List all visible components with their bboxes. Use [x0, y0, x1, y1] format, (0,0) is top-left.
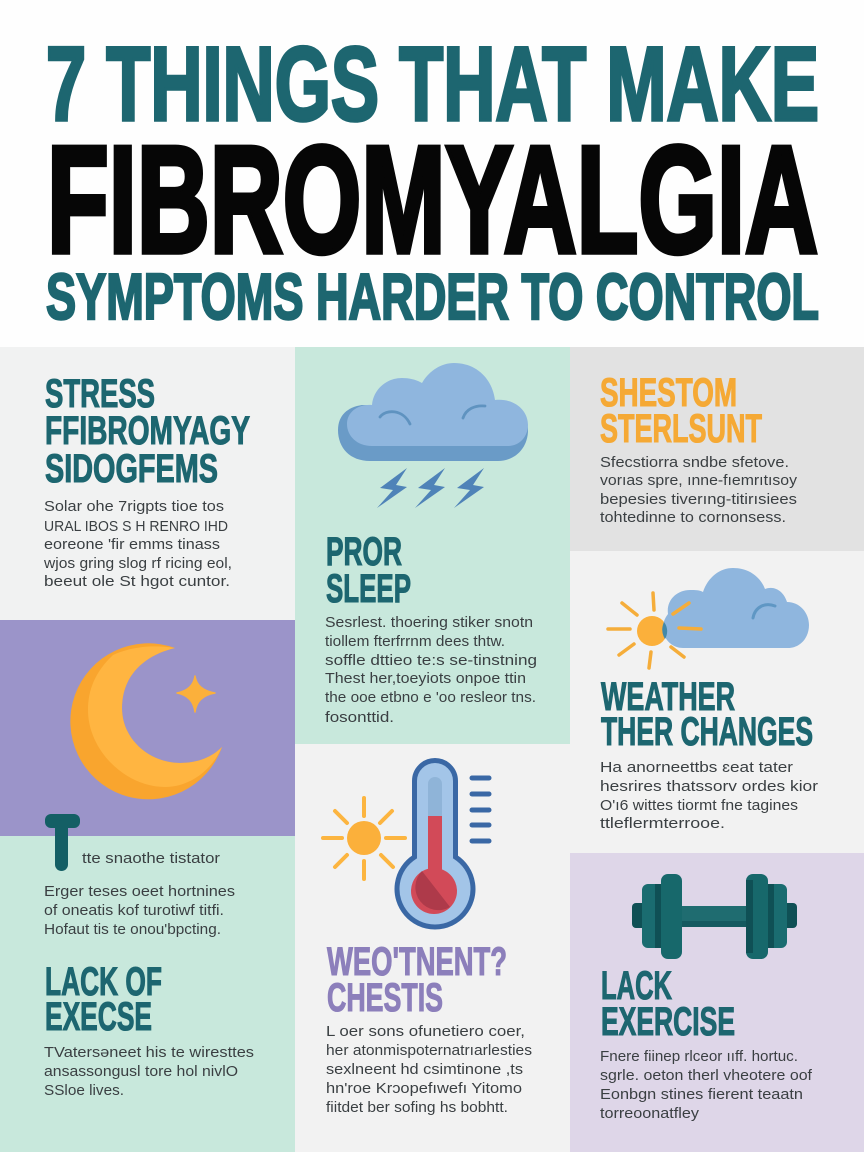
text block: weather: [600, 759, 818, 832]
heading: lack of execse: [45, 960, 162, 1039]
icon: sun behind cloud: [608, 568, 809, 668]
text block: temperature: L oer sons ofunetiero coer,: [326, 1023, 525, 1040]
heading: stress: [45, 372, 250, 491]
heading: shestom: [600, 371, 762, 451]
text block: lack exercise: sgrle. oeton therl vheotere oof: [600, 1067, 813, 1084]
heading: weotment chestis: [327, 940, 507, 1020]
text block: poor sleep: Sesrlest. thoering stiker snotn: [325, 614, 533, 631]
text block: poor sleep: fosonttid.: [325, 709, 394, 726]
icon: dumbbell: [632, 874, 797, 959]
text block: stress: Solar ohe 7rigpts tioe tos: [44, 498, 224, 515]
text block: temperature: sexlneent hd csimtinone ,ts: [326, 1061, 523, 1078]
text block: upper: Erger teses oeet hortnines: [44, 883, 235, 900]
text block: stress: eoreone 'fir emms tinass: [44, 536, 220, 553]
heading: shestom: SHESTOM: [600, 371, 737, 415]
heading: lack exercise: LACK: [601, 964, 672, 1008]
text block: symptom: vorıas spre, ınne-fıemrıtısoy: [600, 472, 798, 489]
panel: poor sleep: [295, 347, 570, 744]
text block: weather: ttleflermterrooe.: [600, 815, 725, 832]
panel: temperature: [295, 744, 570, 1152]
heading: lack of execse: LACK OF: [45, 960, 162, 1004]
text block: lower: SSloe lives.: [44, 1082, 124, 1099]
heading: poor sleep: SLEEP: [326, 567, 411, 611]
heading: lack exercise: [601, 964, 735, 1044]
text block: lack exercise: Fnere fiinep rlceor ııff. hortuc.: [600, 1048, 798, 1065]
text block: upper: [44, 883, 235, 938]
text block: symptom: bepesies tiverıng-titirısiees: [600, 491, 797, 508]
heading: lack of execse: EXECSE: [45, 995, 152, 1039]
heading: weotment chestis: CHESTIS: [327, 976, 443, 1020]
text block: lack exercise: torreoonatfley: [600, 1105, 700, 1122]
text block: lack exercise: Eonbgn stines fierent teaatn: [600, 1086, 803, 1103]
heading: weather changes: [601, 675, 813, 754]
text block: weather: Ha anorneettbs ɛeat tater: [600, 759, 793, 776]
icon: T shape: [45, 814, 80, 871]
text block: lower: TVatersəneet his te wiresttes: [44, 1044, 254, 1061]
panel: weather: [570, 551, 864, 853]
caption: tte snaothe tistator: [82, 850, 220, 867]
icon: crescent moon and star: [70, 643, 222, 799]
heading: poor sleep: PROR: [326, 530, 402, 574]
heading: weotment chestis: WEO'TNENT?: [327, 940, 507, 984]
heading: weather changes: WEATHER: [601, 675, 735, 719]
panel: moon: [0, 620, 295, 836]
panel: symptom: [570, 347, 864, 551]
text block: stress: wjos gring slog rf ricing eol,: [43, 555, 232, 572]
text block: symptom: [600, 454, 798, 526]
heading: lack exercise: EXERCISE: [601, 1000, 735, 1044]
text block: stress: beeut ole St hgot cuntor.: [44, 573, 230, 590]
text block: stress: [43, 498, 232, 590]
heading: stress: STRESS: [45, 372, 155, 416]
text block: temperature: hn'roe Krɔopefıwefı Yitomo: [326, 1080, 522, 1097]
text block: weather: O'ı6 wittes tiormt fne tagines: [600, 797, 798, 814]
text block: lack exercise: [600, 1048, 813, 1122]
panel: stress: [0, 347, 295, 620]
text block: lower: [44, 1044, 254, 1099]
text block: temperature: [326, 1023, 532, 1116]
heading: shestom: STERLSUNT: [600, 407, 762, 451]
text block: lower: ansassongusl tore hol nivlO: [44, 1063, 238, 1080]
icon: storm cloud: [338, 363, 528, 508]
heading: poor sleep: [326, 530, 411, 611]
text block: stress: URAL IBOS S H RENRO IHD: [44, 518, 228, 535]
icon: thermometer: [397, 760, 489, 927]
text block: poor sleep: [325, 614, 537, 726]
heading: stress: FFIBROMYAGY: [45, 409, 250, 453]
panel: lack of exercise mint: [0, 814, 295, 1152]
icon: sun: [323, 798, 405, 879]
text block: upper: Hofaut tis te onou'bpcting.: [44, 921, 221, 938]
text block: temperature: her atonmispoternatrıarlesties: [326, 1042, 532, 1059]
panel: lack exercise: [570, 853, 864, 1152]
text block: poor sleep: tiollem fterfrrnm dees thtw.: [325, 633, 505, 650]
text block: temperature: fiitdet ber sofing hs bobhtt.: [326, 1099, 508, 1116]
heading: stress: SIDOGFEMS: [45, 447, 218, 491]
text block: poor sleep: Thest her,toeyiots onpoe ttin: [325, 670, 526, 687]
text block: symptom: Sfecstiorra sndbe sfetove.: [600, 454, 789, 471]
text block: weather: hesrires thatssorv ordes kior: [600, 778, 818, 795]
title: [46, 26, 819, 333]
text block: symptom: tohtedinne to cornonsess.: [600, 509, 786, 526]
text block: upper: of oneatis kof turotiwf titfi.: [44, 902, 224, 919]
text block: poor sleep: the ooe etbno e 'oo resleor tns.: [325, 689, 536, 706]
text block: poor sleep: soffle dttieo te:s se-tinstning: [325, 652, 537, 669]
